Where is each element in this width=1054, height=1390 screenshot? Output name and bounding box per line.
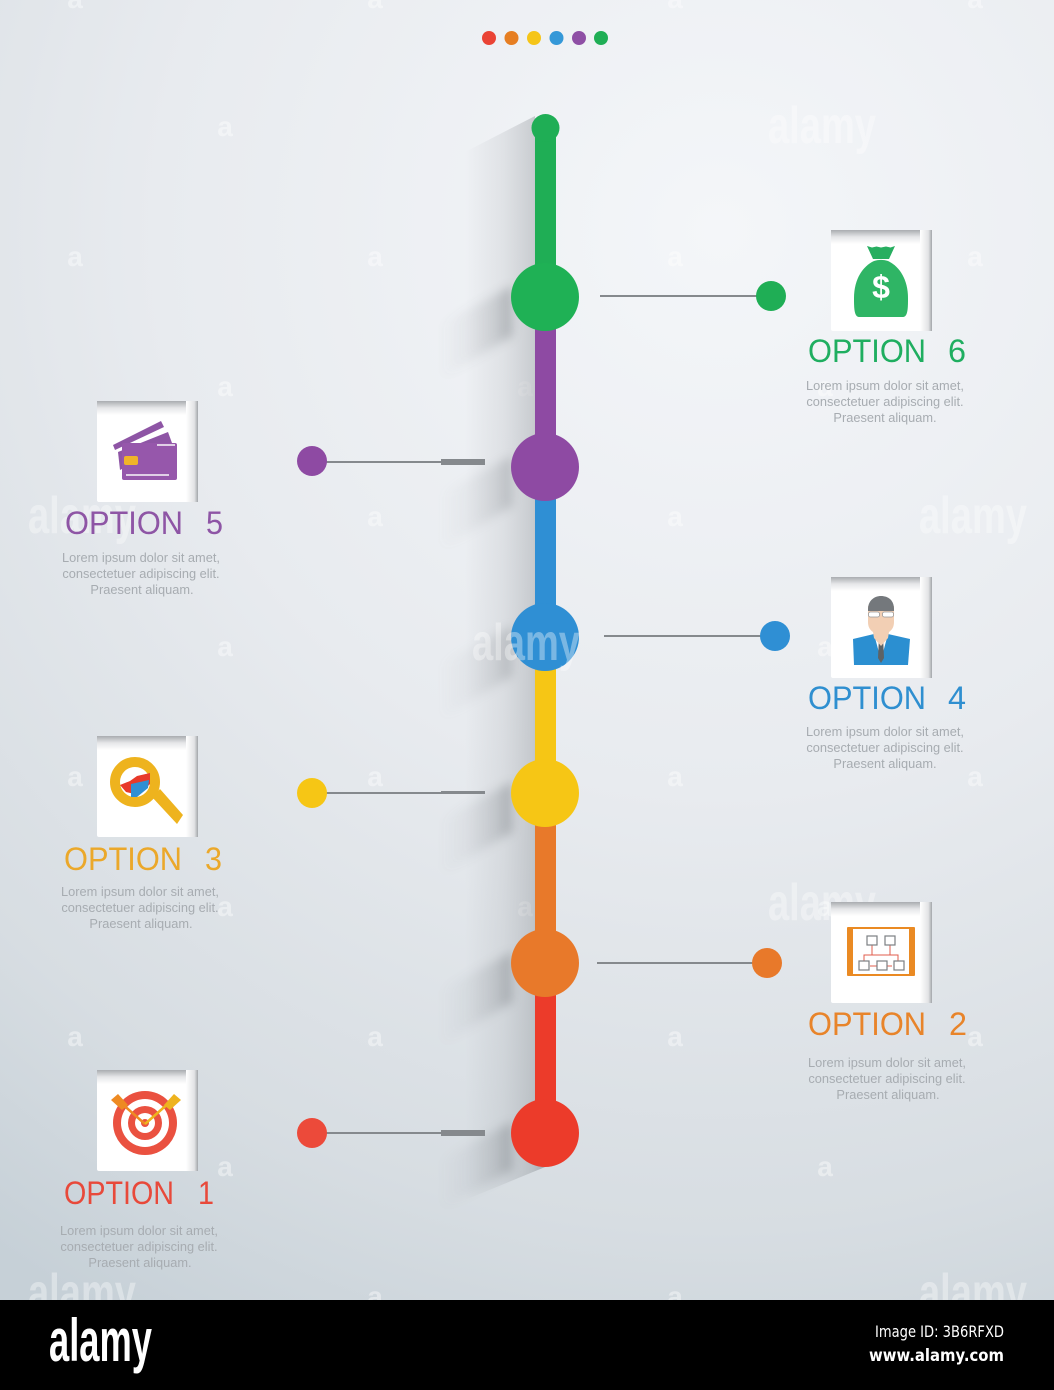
description [62,550,220,597]
watermarks: a [967,761,983,792]
watermarks: a [667,761,683,792]
description: Lorem ipsum dolor sit amet, [62,550,220,565]
description: Praesent aliquam. [833,410,937,425]
icon: magnifying glass [97,736,198,837]
node: option 5 [511,433,579,501]
watermarks: alamy [28,487,136,545]
footer url: www.alamy.com [869,1346,1004,1366]
watermarks: a [967,241,983,272]
description: Praesent aliquam. [836,1087,940,1102]
description [61,884,219,931]
panel: option 3 [61,736,222,931]
watermarks: a [217,891,233,922]
connector: option 6 [600,281,786,311]
watermarks: alamy [768,97,876,155]
image id: Image ID: 3B6RFXD [875,1322,1004,1341]
watermarks: a [217,1151,233,1182]
node: option 3 [511,759,579,827]
description [806,378,964,425]
node: option 6 [511,263,579,331]
watermarks: a [67,1021,83,1052]
heading: OPTION [64,841,182,877]
description: Lorem ipsum dolor sit amet, [61,884,219,899]
watermark over node: alamy [472,614,580,672]
watermarks: a [517,371,533,402]
panel: option 6 [806,230,966,425]
watermarks: a [217,631,233,662]
description: consectetuer adipiscing elit. [61,900,219,915]
watermarks: a [367,761,383,792]
heading: OPTION [808,680,926,716]
panel: option 1 [60,1070,218,1270]
watermarks: a [217,371,233,402]
description: Lorem ipsum dolor sit amet, [806,724,964,739]
panel: option 2 [808,902,967,1102]
description: consectetuer adipiscing elit. [808,1071,966,1086]
description: Lorem ipsum dolor sit amet, [808,1055,966,1070]
heading: 3 [205,841,222,877]
panel: option 5 [62,401,223,597]
heading: OPTION [808,333,926,369]
watermarks: a [817,891,833,922]
description [806,724,964,771]
watermarks: a [967,1021,983,1052]
footer bar [0,1300,1054,1390]
heading: 2 [949,1006,967,1042]
long shadow of timeline [440,116,550,1210]
watermarks: a [67,761,83,792]
heading: 6 [948,333,966,369]
description: Praesent aliquam. [88,1255,192,1270]
watermarks: a [667,501,683,532]
header colour dots [482,31,608,45]
icon: money bag: $ [872,269,890,305]
description: Lorem ipsum dolor sit amet, [60,1223,218,1238]
icon: flow chart board [831,902,932,1003]
watermarks: a [367,241,383,272]
watermarks: alamy [28,1264,136,1322]
watermarks: a [817,1151,833,1182]
watermarks: a [367,1281,383,1312]
description [808,1055,966,1102]
description: Praesent aliquam. [833,756,937,771]
heading: OPTION [808,1006,926,1042]
description: Lorem ipsum dolor sit amet, [806,378,964,393]
connector: option 4 [604,621,790,651]
heading: OPTION [65,505,183,541]
icon: money bag [831,230,932,331]
footer logo: alamy [49,1307,152,1374]
watermarks: a [367,501,383,532]
node: option 1 [511,1099,579,1167]
node: option 4 [511,603,579,671]
heading: 4 [948,680,966,716]
description: consectetuer adipiscing elit. [60,1239,218,1254]
heading: 5 [206,505,223,541]
watermarks: a [217,111,233,142]
connector: option 1 [297,1118,485,1148]
watermarks: a [817,371,833,402]
icon: businessman [831,577,932,678]
watermarks: a [517,891,533,922]
watermarks: a [667,1021,683,1052]
watermarks: a [667,1281,683,1312]
description [60,1223,218,1270]
watermarks: a [817,631,833,662]
node: option 2 [511,929,579,997]
watermarks: alamy [768,874,876,932]
connector: option 3 [297,778,485,808]
panel: option 4 [806,577,966,771]
description: consectetuer adipiscing elit. [62,566,220,581]
icon: credit cards [97,401,198,502]
heading: 1 [198,1175,214,1211]
watermarks: a [67,241,83,272]
watermarks: a [367,1021,383,1052]
connector: option 5 [297,446,485,476]
description: Praesent aliquam. [90,582,194,597]
heading: OPTION [64,1175,174,1211]
connector: option 2 [597,948,782,978]
description: consectetuer adipiscing elit. [806,740,964,755]
watermarks: a [667,241,683,272]
icon: target with arrows [97,1070,198,1171]
description: consectetuer adipiscing elit. [806,394,964,409]
description: Praesent aliquam. [89,916,193,931]
timeline spine [532,114,560,1132]
